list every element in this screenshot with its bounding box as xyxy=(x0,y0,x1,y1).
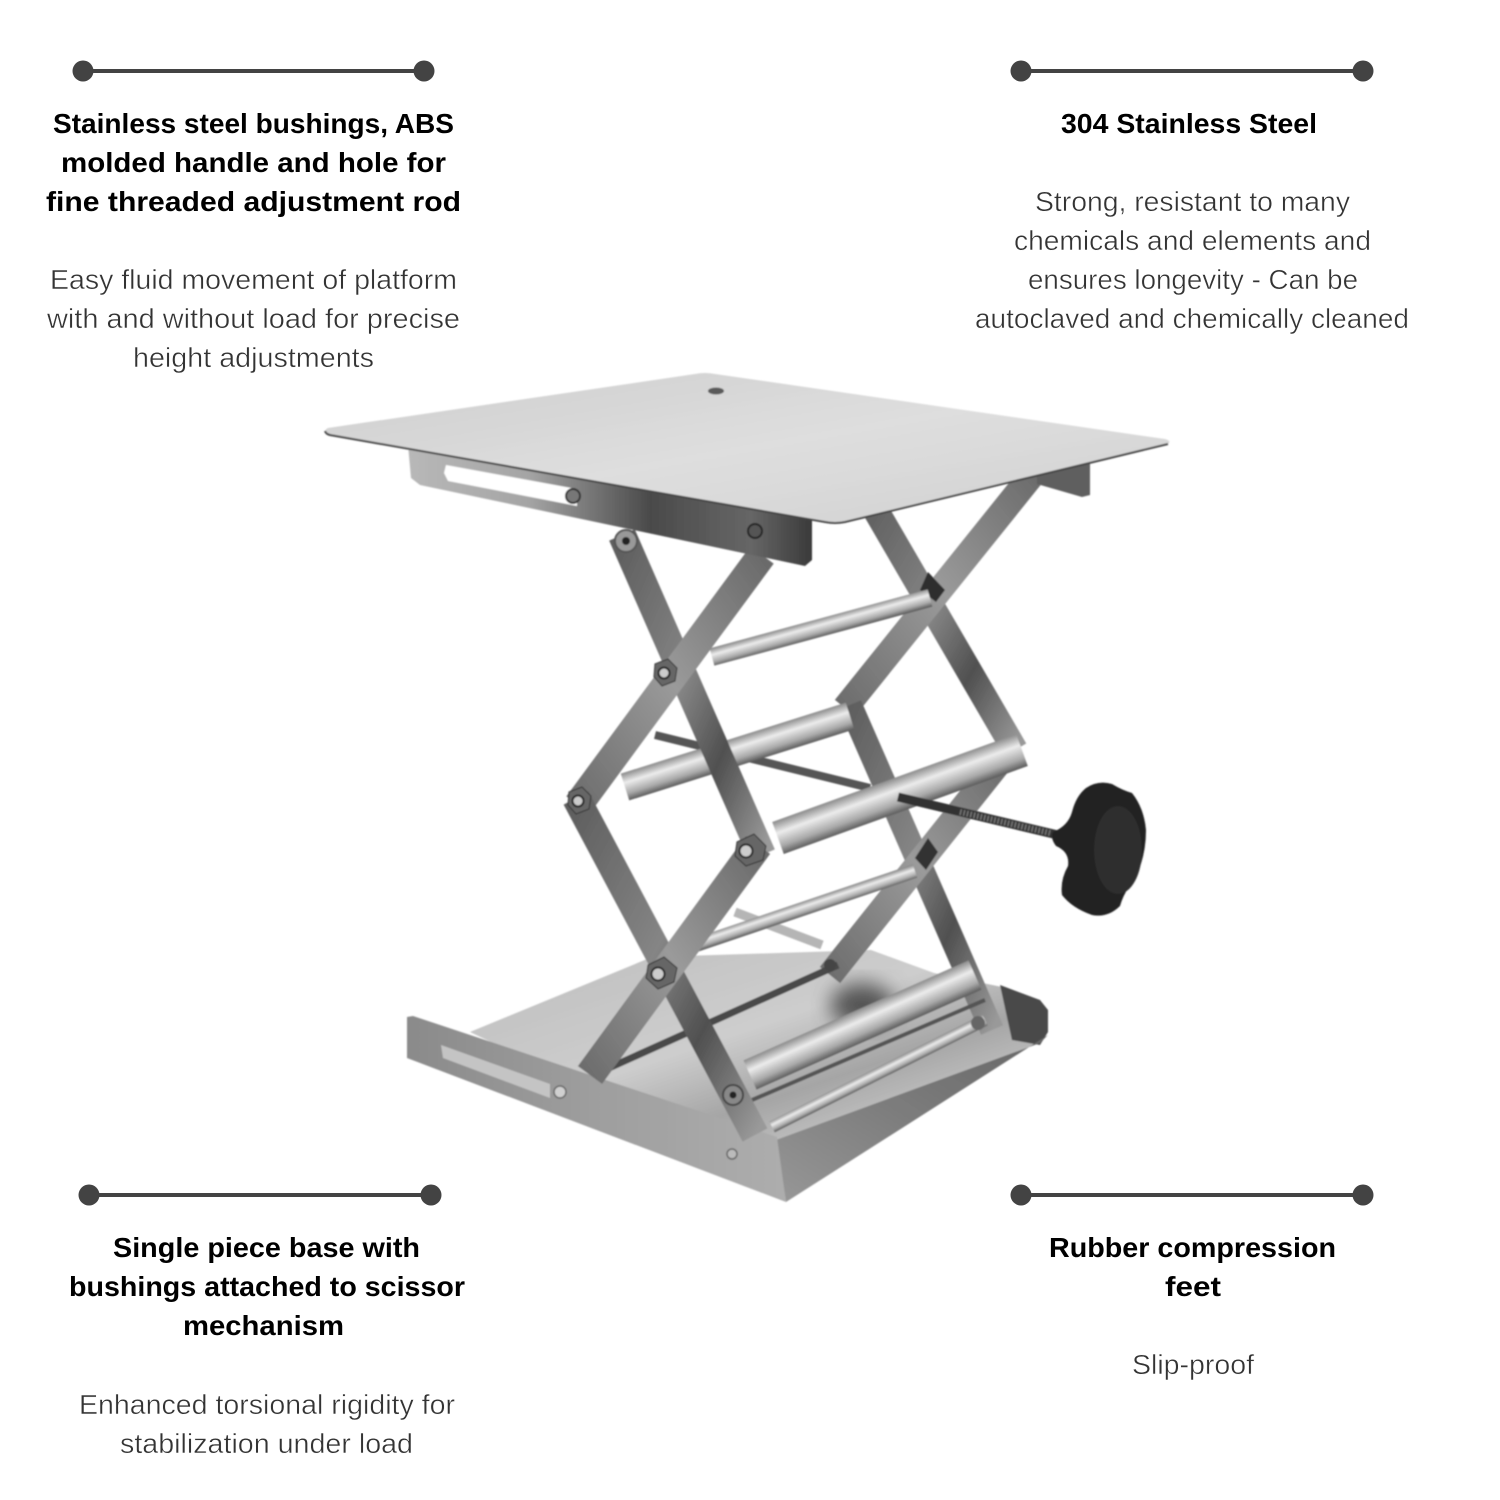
threaded adjustment rod xyxy=(898,797,1062,836)
text: bushings description xyxy=(46,264,460,373)
heading: rubber feet: feet xyxy=(1165,1271,1221,1302)
text: base description: Enhanced torsional rigidity for xyxy=(79,1389,455,1420)
connector line: bottom right xyxy=(1010,1184,1374,1206)
heading: bushings: Stainless steel bushings, ABS xyxy=(53,108,454,139)
heading: single piece base xyxy=(69,1232,465,1341)
heading: rubber feet: Rubber compression xyxy=(1049,1232,1336,1263)
text: bushings description: with and without load for precise xyxy=(46,303,460,334)
text: bushings description: height adjustments xyxy=(133,342,374,373)
right top bracket xyxy=(1037,455,1090,497)
callout: single piece base xyxy=(69,1184,465,1459)
callout: stainless steel xyxy=(975,60,1409,334)
connector line: bottom left xyxy=(78,1184,442,1206)
text: steel description: Strong, resistant to many xyxy=(1035,186,1350,217)
base front wall xyxy=(407,1016,786,1202)
text: feet description: Slip-proof xyxy=(1132,1349,1254,1380)
callout: rubber feet xyxy=(1010,1184,1374,1380)
heading: bushings: molded handle and hole for xyxy=(61,147,446,178)
heading: rubber feet xyxy=(1049,1232,1336,1302)
heading: 304 stainless steel: 304 Stainless Steel xyxy=(1061,108,1317,139)
cross rods xyxy=(600,598,1022,1127)
front scissor arms xyxy=(576,535,762,1135)
text: steel description xyxy=(975,186,1409,334)
text: base description xyxy=(79,1389,455,1459)
rear scissor arms xyxy=(830,470,1036,1030)
base right face xyxy=(776,1035,1048,1202)
top platform xyxy=(325,373,1169,523)
heading: bushings: fine threaded adjustment rod xyxy=(46,186,461,217)
text: steel description: chemicals and elements and xyxy=(1014,225,1371,256)
heading: single piece base: bushings attached to scissor xyxy=(69,1271,465,1302)
product illustration: lab jack xyxy=(325,373,1169,1202)
text: steel description: ensures longevity - Can be xyxy=(1028,264,1358,295)
rear base bar xyxy=(735,912,822,945)
heading: single piece base: mechanism xyxy=(183,1310,344,1341)
text: bushings description: Easy fluid movement of platform xyxy=(50,264,457,295)
base floor xyxy=(470,950,1040,1143)
heading: single piece base: Single piece base with xyxy=(113,1232,420,1263)
bolts xyxy=(568,530,985,1105)
base rear wall xyxy=(1000,985,1048,1045)
threaded rod: rear section xyxy=(655,735,870,788)
connector line: top left xyxy=(72,60,434,82)
text: steel description: autoclaved and chemically cleaned xyxy=(975,303,1409,334)
text: base description: stabilization under load xyxy=(120,1428,413,1459)
heading: bushings xyxy=(46,108,461,217)
left top bracket xyxy=(408,445,812,566)
connector line: top right xyxy=(1010,60,1374,82)
knob handle xyxy=(1052,783,1146,916)
callout: bushings and handle xyxy=(46,60,461,373)
floor reflection xyxy=(830,983,894,1027)
